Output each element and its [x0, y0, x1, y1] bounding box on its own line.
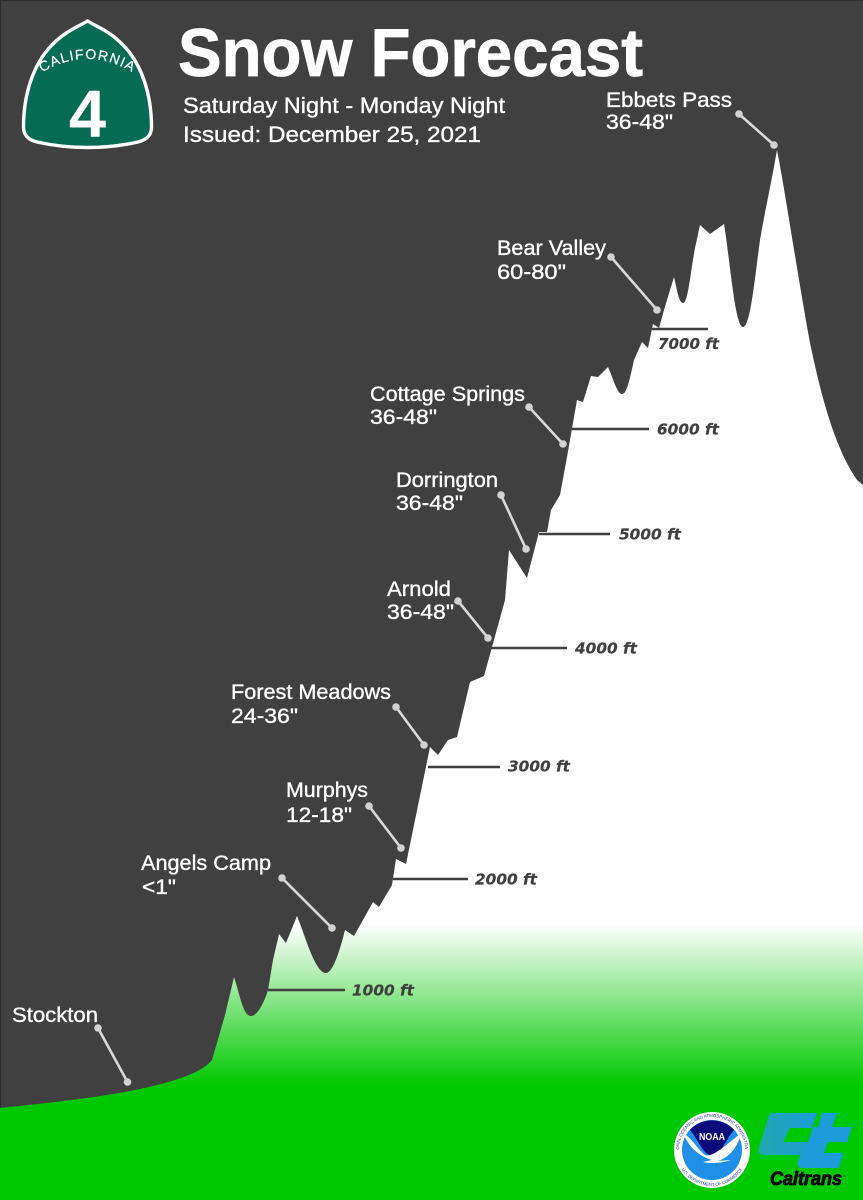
elevation marker: 5000 ft: 5000 ft — [619, 526, 682, 544]
location label: Dorrington: Dorrington — [396, 468, 498, 492]
logo: NOAA seal: NATIONAL OCEANIC AND ATMOSPHERIC ADMINISTRATION — [676, 1114, 748, 1150]
logo: NOAA seal: NOAA — [699, 1131, 725, 1143]
logo: Caltrans — [759, 1113, 852, 1190]
location label: Ebbets Pass: Ebbets Pass — [606, 88, 732, 112]
elevation marker: 4000 ft: 4000 ft — [574, 640, 638, 658]
elevation marker: 2000 ft: 2000 ft — [475, 870, 538, 888]
location label: Bear Valley — [497, 236, 661, 314]
location label: Arnold — [387, 577, 492, 642]
location label: Stockton — [12, 1003, 131, 1086]
location label: Ebbets Pass — [606, 88, 778, 149]
location label: Angels Camp: <1" — [142, 875, 176, 899]
location label: Bear Valley: Bear Valley — [497, 236, 606, 260]
icon: California state route 4 shield: CALIFORNIA — [40, 49, 134, 72]
elevation marker: 7000 ft: 7000 ft — [658, 335, 720, 353]
location label: Ebbets Pass: 36-48" — [606, 110, 673, 134]
subtitle: issue date: Issued: December 25, 2021 — [183, 122, 481, 147]
location label: Arnold: Arnold — [387, 577, 451, 601]
elevation marker: 6000 ft: 6000 ft — [657, 420, 720, 438]
icon: California state route 4 shield — [22, 19, 154, 152]
location label: Angels Camp: Angels Camp — [141, 851, 271, 875]
location label: Forest Meadows: 24-36" — [231, 704, 298, 728]
location label: Stockton: Stockton — [12, 1003, 98, 1027]
title: Snow Forecast — [178, 15, 643, 91]
elevation marker: 3000 ft: 3000 ft — [508, 758, 571, 776]
location label: Forest Meadows — [231, 680, 428, 749]
location label: Cottage Springs: Cottage Springs — [370, 382, 525, 406]
logo: NOAA seal: U.S. DEPARTMENT OF COMMERCE — [682, 1168, 742, 1186]
elevation marker: 7000 ft — [652, 329, 720, 353]
location label: Cottage Springs: 36-48" — [370, 405, 437, 429]
location label: Forest Meadows: Forest Meadows — [231, 680, 391, 704]
location label: Dorrington: 36-48" — [396, 491, 463, 515]
location label: Arnold: 36-48" — [387, 600, 454, 624]
elevation marker: 1000 ft: 1000 ft — [352, 982, 415, 1000]
location label: Dorrington — [396, 468, 530, 553]
subtitle: forecast period: Saturday Night - Monday Night — [183, 93, 506, 118]
logo: Caltrans: Caltrans — [770, 1169, 842, 1190]
location label: Bear Valley: 60-80" — [497, 260, 566, 284]
location label: Cottage Springs — [370, 382, 567, 448]
location label: Murphys: Murphys — [286, 778, 368, 802]
location label: Murphys: 12-18" — [286, 803, 352, 827]
icon: California state route 4 shield: 4 — [69, 77, 106, 152]
location label: Murphys — [286, 778, 405, 852]
logo: Caltrans: ™ — [842, 1174, 846, 1179]
location label: Angels Camp — [141, 851, 336, 932]
